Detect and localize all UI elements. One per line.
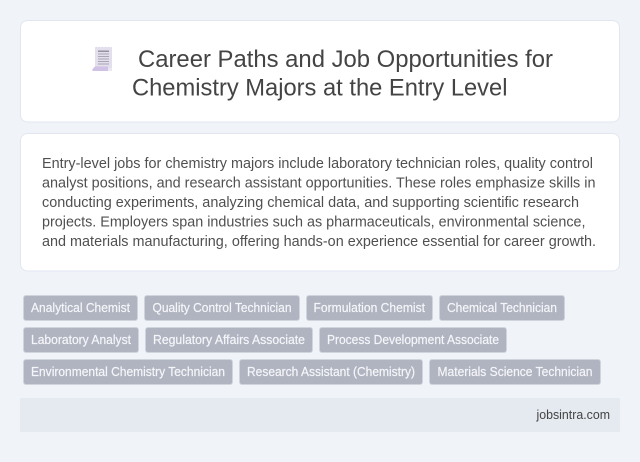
panel: description card [20,134,620,271]
tag: Quality Control Technician [144,296,300,320]
title [132,46,553,102]
tag: Process Development Associate: Process Development Associate [327,333,499,347]
tag: Laboratory Analyst: Laboratory Analyst [31,333,131,347]
tag: Quality Control Technician: Quality Control Technician [152,301,292,315]
title: Chemistry Majors at the Entry Level [132,74,508,102]
tag: Chemical Technician: Chemical Technician [447,301,557,315]
tag: Materials Science Technician: Materials Science Technician [438,365,593,379]
tag list [24,296,600,384]
tag: Environmental Chemistry Technician [24,360,232,384]
tag: Regulatory Affairs Associate [146,328,312,352]
tag: Research Assistant (Chemistry): Research Assistant (Chemistry) [247,365,415,379]
footer bar [20,398,620,432]
tag: Formulation Chemist [306,296,432,320]
icon: paper scroll [92,47,112,71]
tag: Formulation Chemist: Formulation Chemist [314,301,425,315]
tag: Materials Science Technician [430,360,600,384]
text block: description: and materials manufacturing, offering hands-on experience essential for career growth. [42,234,596,250]
text block: description: projects. Employers span industries such as pharmaceuticals, environmental science, [42,214,586,230]
text block: description: conducting experiments, analyzing chemical data, and supporting scientific research [42,195,579,211]
tag: Environmental Chemistry Technician: Environmental Chemistry Technician [31,365,225,379]
tag: Research Assistant (Chemistry) [240,360,422,384]
tag: Analytical Chemist: Analytical Chemist [31,301,130,315]
text block: description [42,156,596,250]
tag: Regulatory Affairs Associate: Regulatory Affairs Associate [153,333,305,347]
tag: Chemical Technician [440,296,564,320]
footer source text: jobsintra.com [536,408,610,422]
title: Career Paths and Job Opportunities for [138,46,553,73]
tag: Analytical Chemist [24,296,138,320]
tag: Laboratory Analyst [24,328,138,352]
panel: header card [20,20,620,122]
text block: description: analyst positions, and research assistant opportunities. These roles emphasize skills in [42,176,596,192]
tag: Process Development Associate [320,328,506,352]
text block: description: Entry-level jobs for chemistry majors include laboratory technician roles, quality control [42,156,593,172]
